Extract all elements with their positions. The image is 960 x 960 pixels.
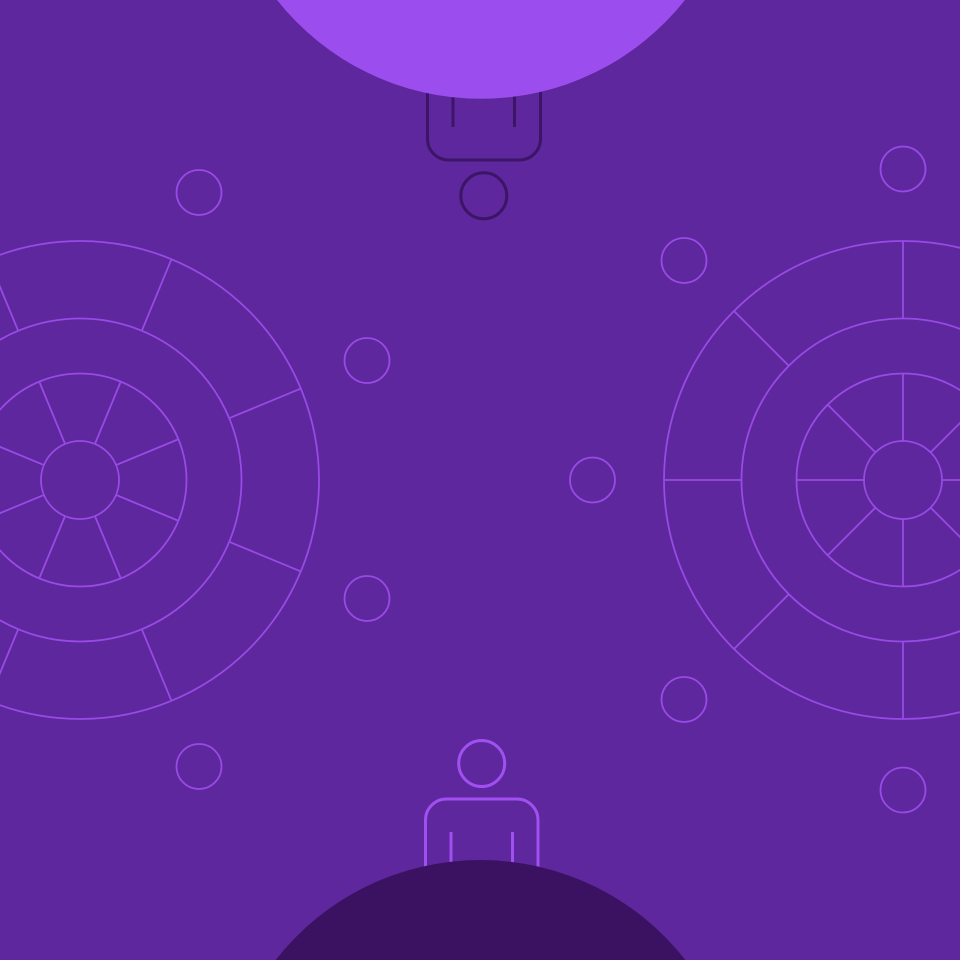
bottom dark semicircle xyxy=(276,860,685,960)
icon: dark person at top xyxy=(428,80,540,219)
top light semicircle xyxy=(277,0,685,99)
icon: light person at bottom xyxy=(426,740,538,880)
left wheel xyxy=(0,241,319,719)
small outlined circles xyxy=(176,146,926,812)
right wheel xyxy=(664,241,960,719)
